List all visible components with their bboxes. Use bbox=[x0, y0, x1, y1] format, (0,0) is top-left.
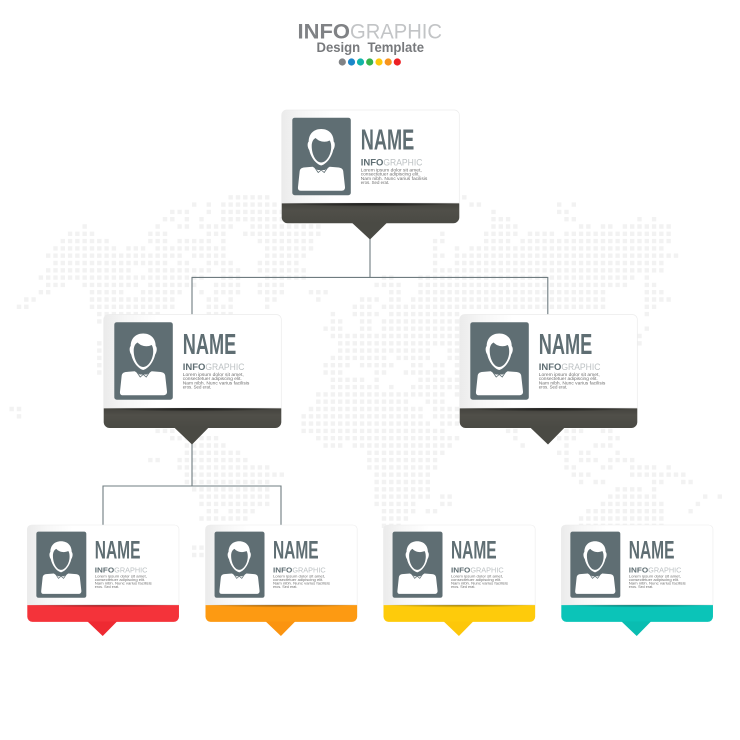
card: bottom red: eros. Sed erat. bbox=[95, 584, 119, 589]
card: bottom orange: Lorem ipsum dolor sit amet, bbox=[273, 573, 325, 578]
card: middle left: INFO bbox=[183, 362, 205, 372]
colored dots row bbox=[339, 58, 401, 66]
card: top bbox=[282, 110, 459, 240]
card: bottom yellow: GRAPHIC bbox=[470, 566, 504, 575]
card: bottom yellow: INFO bbox=[451, 566, 470, 575]
card: middle left: eros. Sed erat. bbox=[183, 384, 211, 390]
card: top: Nam nibh. Nunc varius facilisis bbox=[361, 176, 428, 181]
card: middle right: INFO bbox=[539, 362, 561, 372]
card: bottom teal: Nam nibh. Nunc varius facilisis bbox=[629, 581, 686, 586]
title: Design Template bbox=[316, 40, 424, 55]
card: bottom yellow: eros. Sed erat. bbox=[451, 584, 475, 589]
card: bottom teal: consectetuer adipiscing elit. bbox=[629, 577, 679, 582]
card: bottom teal: Lorem ipsum dolor sit amet, bbox=[629, 573, 681, 578]
card: top: INFO bbox=[361, 158, 383, 168]
card: bottom teal: GRAPHIC bbox=[648, 566, 682, 575]
card: bottom yellow bbox=[384, 525, 535, 636]
card: middle right: NAME bbox=[539, 329, 592, 361]
card: bottom red bbox=[27, 525, 179, 636]
card: bottom orange bbox=[206, 525, 357, 636]
card: bottom yellow: Lorem ipsum dolor sit amet, bbox=[451, 573, 503, 578]
card: top: Lorem ipsum dolor sit amet, bbox=[361, 167, 422, 172]
card: bottom orange: NAME bbox=[273, 538, 319, 565]
card: middle right: consectetuer adipiscing elit. bbox=[539, 376, 598, 381]
card: bottom red: Lorem ipsum dolor sit amet, bbox=[95, 573, 147, 578]
card: bottom teal: NAME bbox=[629, 538, 674, 565]
card: top: NAME bbox=[361, 124, 414, 156]
card: middle left: GRAPHIC bbox=[205, 362, 245, 372]
card: middle left: Lorem ipsum dolor sit amet, bbox=[183, 372, 244, 377]
connector lines bbox=[103, 236, 548, 525]
card: middle left bbox=[104, 314, 281, 444]
card: bottom yellow: NAME bbox=[451, 538, 497, 565]
card: bottom red: GRAPHIC bbox=[114, 566, 148, 575]
card: middle left: Nam nibh. Nunc varius facilisis bbox=[183, 380, 250, 385]
card: middle right bbox=[460, 314, 637, 444]
card: bottom teal bbox=[561, 525, 713, 636]
card: top: eros. Sed erat. bbox=[361, 180, 389, 185]
card: bottom red: Nam nibh. Nunc varius facilisis bbox=[95, 581, 152, 586]
card: bottom orange: INFO bbox=[273, 566, 292, 575]
card: middle left: NAME bbox=[183, 329, 236, 361]
card: top: consectetuer adipiscing elit. bbox=[361, 172, 420, 177]
card: bottom orange: eros. Sed erat. bbox=[273, 584, 297, 589]
card: middle right: Nam nibh. Nunc varius facilisis bbox=[539, 380, 606, 385]
card: bottom teal: INFO bbox=[629, 566, 648, 575]
card: bottom yellow: Nam nibh. Nunc varius facilisis bbox=[451, 581, 508, 586]
card: bottom teal: eros. Sed erat. bbox=[629, 584, 653, 589]
card: middle right: eros. Sed erat. bbox=[539, 384, 567, 390]
card: bottom yellow: consectetuer adipiscing elit. bbox=[451, 577, 501, 582]
world map dots bbox=[10, 197, 725, 555]
card: bottom orange: GRAPHIC bbox=[292, 566, 326, 575]
title: GRAPHIC bbox=[350, 19, 442, 43]
title bbox=[298, 19, 442, 55]
card: bottom red: INFO bbox=[95, 566, 114, 575]
card: bottom red: consectetuer adipiscing elit. bbox=[95, 577, 145, 582]
title: INFO bbox=[298, 19, 350, 43]
card: bottom red: NAME bbox=[95, 538, 140, 565]
card: middle right: GRAPHIC bbox=[561, 362, 601, 372]
card: middle right: Lorem ipsum dolor sit amet, bbox=[539, 372, 600, 377]
card: top: GRAPHIC bbox=[383, 158, 423, 168]
card: bottom orange: consectetuer adipiscing elit. bbox=[273, 577, 323, 582]
card: bottom orange: Nam nibh. Nunc varius facilisis bbox=[273, 581, 330, 586]
card: middle left: consectetuer adipiscing elit. bbox=[183, 376, 242, 381]
